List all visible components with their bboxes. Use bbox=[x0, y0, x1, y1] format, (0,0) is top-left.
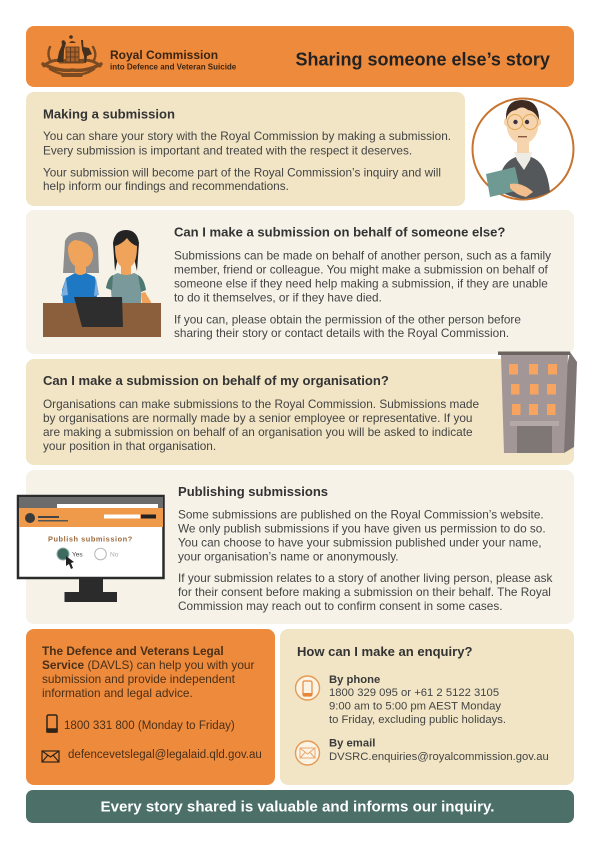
panel: publishing submissions bbox=[18, 470, 574, 624]
body text: your position in that organisation. bbox=[43, 439, 216, 453]
body text: If your submission relates to a story of another living person, please ask bbox=[178, 571, 553, 585]
text block: Service (DAVLS) can help you with your bbox=[42, 658, 254, 672]
by phone: 9:00 am to 5:00 pm AEST Monday bbox=[329, 700, 501, 712]
illustration: two people at a laptop bbox=[43, 230, 161, 337]
body text: sharing their story or contact details with the Royal Commission. bbox=[174, 326, 509, 340]
logo text: Royal Commission bbox=[110, 48, 218, 62]
heading: Publishing submissions bbox=[178, 484, 328, 499]
phone number: 1800 331 800 (Monday to Friday) bbox=[64, 720, 235, 732]
panel: on behalf of organisation bbox=[26, 359, 574, 465]
banner text: Every story shared is valuable and informs our inquiry. bbox=[101, 798, 494, 816]
body text bbox=[174, 248, 551, 340]
icon: office building bbox=[498, 352, 577, 453]
banner bbox=[26, 790, 574, 823]
panel: header bbox=[26, 26, 574, 87]
panel: enquiries bbox=[280, 629, 574, 785]
body text: help inform our findings and recommendations. bbox=[43, 179, 289, 193]
icon: phone circle bbox=[296, 676, 320, 700]
body text: are making a submission on behalf of an organisation you will be asked to indicate bbox=[43, 425, 473, 439]
body text: Every submission is important and treated with the respect it deserves. bbox=[43, 143, 412, 157]
body text: Your submission will become part of the Royal Commission’s inquiry and will bbox=[43, 166, 441, 180]
illustration: monitor bbox=[18, 496, 164, 602]
body text: Submissions can be made on behalf of another person, such as a family bbox=[174, 248, 551, 262]
logo text bbox=[110, 48, 237, 72]
panel: on behalf of someone else bbox=[26, 210, 574, 354]
icon: cursor bbox=[66, 556, 74, 569]
body text: We only publish submissions if you have given us permission to do so. bbox=[178, 522, 546, 536]
body text: for their consent before making a submission on their behalf. The Royal bbox=[178, 585, 551, 599]
title: Sharing someone else’s story bbox=[296, 50, 550, 70]
body text: member, friend or colleague. You might make a submission on behalf of bbox=[174, 262, 549, 276]
email: defencevetslegal@legalaid.qld.gov.au bbox=[68, 749, 262, 761]
icon: envelope circle bbox=[296, 741, 320, 765]
panel: legal service bbox=[26, 629, 275, 785]
by phone: 1800 329 095 or +61 2 5122 3105 bbox=[329, 687, 499, 699]
logo text: into Defence and Veteran Suicide bbox=[110, 62, 237, 72]
text block: The Defence and Veterans Legal bbox=[42, 644, 224, 658]
heading: How can I make an enquiry? bbox=[297, 644, 472, 659]
text block bbox=[42, 644, 254, 700]
body text: Some submissions are published on the Royal Commission’s website. bbox=[178, 508, 544, 522]
icon: envelope bbox=[42, 751, 59, 762]
icon: person with folder bbox=[472, 98, 574, 200]
heading: Can I make a submission on behalf of my organisation? bbox=[43, 373, 389, 388]
heading: Making a submission bbox=[43, 106, 175, 122]
body text bbox=[178, 508, 553, 613]
body text: If you can, please obtain the permission of the other person before bbox=[174, 312, 521, 326]
body text bbox=[43, 129, 451, 193]
radio options bbox=[57, 548, 119, 560]
body text: You can choose to have your submission published under your name, bbox=[178, 535, 542, 549]
by email: DVSRC.enquiries@royalcommission.gov.au bbox=[329, 751, 549, 763]
body text: You can share your story with the Royal Commission by making a submission. bbox=[43, 129, 451, 143]
body text: your organisation’s name or anonymously. bbox=[178, 549, 399, 563]
heading: Can I make a submission on behalf of someone else? bbox=[174, 224, 505, 240]
body text: by organisations are normally made by a senior employee or representative. If you bbox=[43, 411, 472, 425]
body text: Commission may reach out to confirm consent in some cases. bbox=[178, 599, 503, 613]
radio options: Yes bbox=[72, 552, 83, 558]
by phone: By phone bbox=[329, 674, 380, 686]
radio options: No bbox=[110, 552, 119, 558]
by email bbox=[329, 738, 549, 763]
text block: information and legal advice. bbox=[42, 686, 193, 700]
by email: By email bbox=[329, 738, 375, 750]
body text bbox=[43, 397, 479, 453]
text block: submission and provide independent bbox=[42, 672, 236, 686]
body text: Organisations can make submissions to the Royal Commission. Submissions made bbox=[43, 397, 479, 411]
by phone bbox=[329, 674, 506, 726]
body text: someone else if they need help making a submission, if they are unable bbox=[174, 276, 548, 290]
by phone: to Friday, excluding public holidays. bbox=[329, 714, 506, 726]
panel: making a submission bbox=[26, 92, 465, 206]
icon: coat of arms bbox=[43, 35, 101, 77]
screen heading: Publish submission? bbox=[48, 534, 133, 544]
icon: phone bbox=[47, 715, 57, 732]
body text: to do it themselves, or if they have died. bbox=[174, 290, 382, 304]
